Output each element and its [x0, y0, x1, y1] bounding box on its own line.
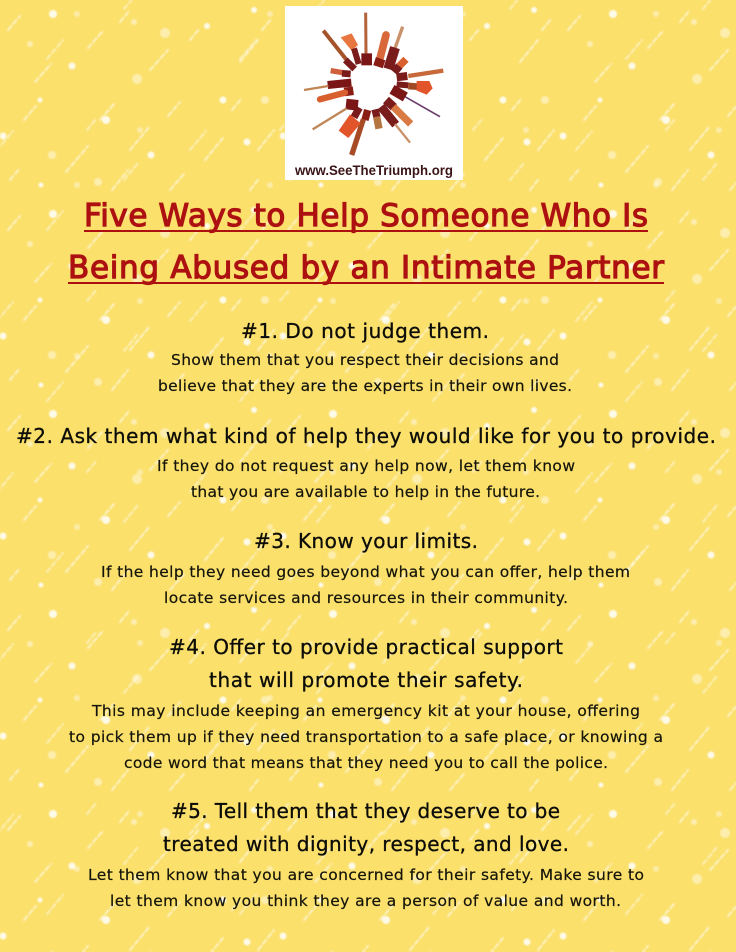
logo panel: [285, 6, 463, 180]
tip 3: locate services and resources in their community.: [164, 589, 568, 607]
title: Being Abused by an Intimate Partner: [68, 250, 664, 286]
tip 3: [101, 529, 630, 607]
tip 3: If the help they need goes beyond what you can offer, help them: [101, 563, 630, 581]
tip 1: believe that they are the experts in their own lives.: [158, 377, 572, 395]
tip 3: #3. Know your limits.: [254, 529, 478, 553]
tip 5: #5. Tell them that they deserve to be: [171, 799, 560, 823]
tip 2: [16, 424, 716, 501]
tip 5: [88, 799, 644, 910]
tip 5: treated with dignity, respect, and love.: [163, 832, 569, 856]
tip 5: let them know you think they are a person of value and worth.: [110, 892, 621, 910]
tip 4: [69, 635, 663, 772]
tip 4: that will promote their safety.: [209, 668, 523, 692]
tip 2: #2. Ask them what kind of help they would like for you to provide.: [16, 424, 716, 448]
tip 4: #4. Offer to provide practical support: [169, 635, 563, 659]
title: Five Ways to Help Someone Who Is: [84, 198, 648, 234]
tip 5: Let them know that you are concerned for their safety. Make sure to: [88, 866, 644, 884]
icon: sunburst of makeup items: [304, 13, 443, 155]
tip 1: #1. Do not judge them.: [241, 319, 489, 343]
title: [68, 198, 664, 286]
logo url: www.SeeTheTriumph.org: [294, 162, 453, 178]
tip 4: code word that means that they need you to call the police.: [124, 754, 608, 772]
tip 2: that you are available to help in the future.: [191, 483, 540, 501]
tip 1: Show them that you respect their decisions and: [171, 351, 559, 369]
tip 4: to pick them up if they need transportation to a safe place, or knowing a: [69, 728, 663, 746]
tip 2: If they do not request any help now, let them know: [157, 457, 575, 475]
tip 1: [158, 319, 572, 395]
tip 4: This may include keeping an emergency kit at your house, offering: [91, 702, 640, 720]
